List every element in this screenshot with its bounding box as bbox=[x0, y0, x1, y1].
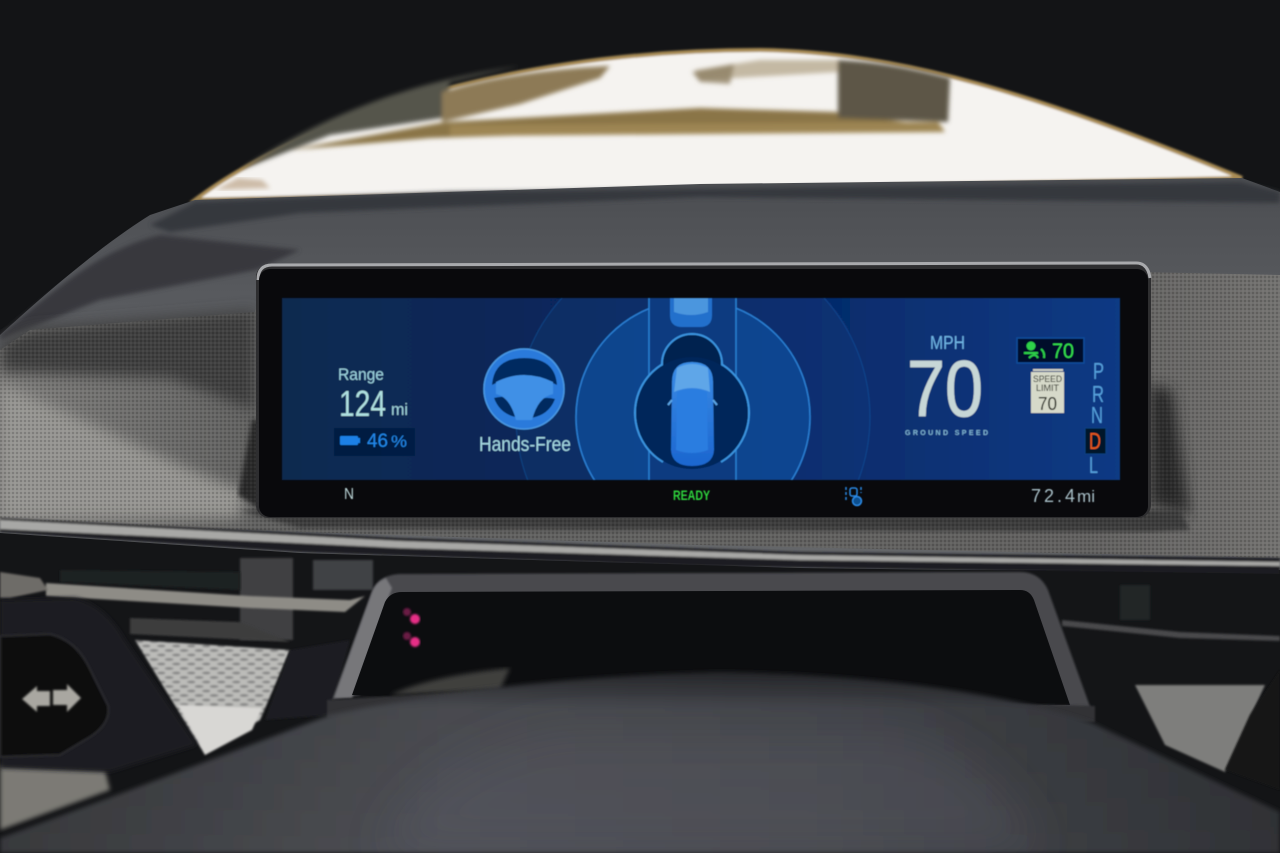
icon: lane arrows bbox=[22, 684, 81, 712]
speed limit sign: LIMIT bbox=[1036, 383, 1059, 393]
instrument shroud bbox=[327, 572, 1095, 722]
windshield reflection bbox=[195, 50, 1242, 200]
silver perforated trim left bbox=[135, 640, 290, 755]
dash top shadow and crease bbox=[0, 182, 1280, 340]
turn signal stalk pod bbox=[0, 598, 197, 772]
hands-free label: Hands-Free bbox=[479, 434, 571, 456]
range readout bbox=[338, 365, 408, 424]
display bezel bbox=[256, 262, 1152, 518]
driver assist status icon bbox=[846, 487, 862, 506]
battery state bbox=[334, 428, 415, 456]
trip odometer: mi bbox=[1077, 487, 1095, 506]
range readout: Range bbox=[338, 365, 384, 384]
speed limit sign: SPEED bbox=[1033, 374, 1062, 384]
pink warning lights bbox=[403, 608, 420, 647]
gear selector PRNDL: P bbox=[1093, 358, 1104, 384]
silver perforated trim right bbox=[1135, 685, 1265, 772]
gear selector PRNDL: D bbox=[1089, 428, 1101, 454]
lower air vent rails bbox=[0, 572, 1280, 641]
battery state: 46 bbox=[367, 431, 388, 452]
display screen bbox=[282, 297, 1121, 507]
speed readout: MPH bbox=[930, 333, 965, 353]
range readout: 124 bbox=[339, 383, 386, 424]
ready status: READY bbox=[673, 487, 710, 503]
lead vehicle bbox=[670, 298, 712, 327]
steering wheel hub bbox=[0, 672, 1280, 853]
compass heading: N bbox=[344, 486, 354, 503]
cruise set speed bbox=[1017, 338, 1084, 363]
gear selector PRNDL: N bbox=[1091, 402, 1103, 428]
own vehicle bbox=[668, 362, 717, 466]
speed limit sign: 70 bbox=[1038, 394, 1057, 414]
cruise set speed: 70 bbox=[1052, 340, 1074, 363]
battery state: % bbox=[391, 432, 407, 451]
lower vent area bbox=[0, 533, 1280, 700]
chrome trim strip bbox=[0, 518, 1280, 575]
range readout: mi bbox=[391, 400, 408, 419]
dark stalk mount bbox=[265, 640, 350, 720]
speed readout: 70 bbox=[907, 344, 983, 433]
trip odometer: 72.4 bbox=[1031, 486, 1075, 506]
gear selector PRNDL bbox=[1085, 358, 1106, 478]
trip odometer bbox=[1031, 486, 1095, 506]
fabric dash cover bbox=[0, 272, 1280, 558]
sensor radar rings bbox=[516, 297, 871, 481]
upper dashboard surface bbox=[0, 178, 1280, 570]
steering wheel hands-free icon bbox=[484, 349, 564, 429]
gear selector PRNDL: L bbox=[1089, 452, 1098, 478]
speed readout: GROUND SPEED bbox=[905, 430, 988, 437]
right dark trim corner bbox=[1225, 670, 1280, 790]
fabric panel below stalk bbox=[0, 765, 110, 830]
speed limit sign bbox=[1031, 369, 1064, 414]
gear selector PRNDL: R bbox=[1092, 381, 1104, 407]
